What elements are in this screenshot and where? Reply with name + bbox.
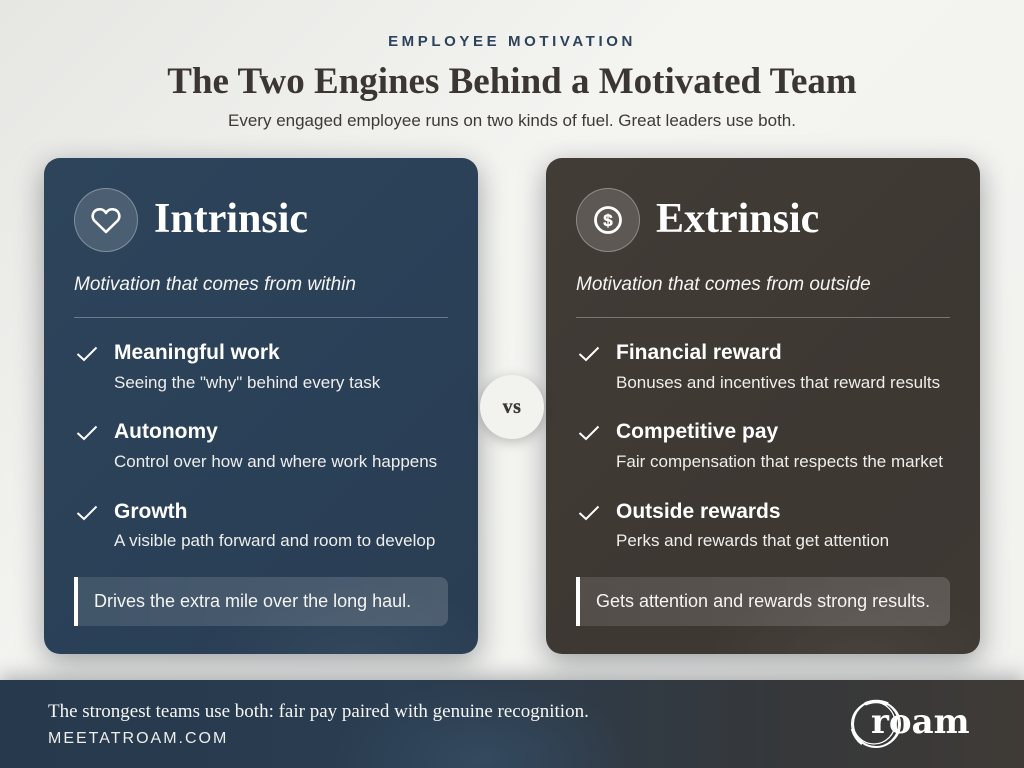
item: meaningful work: Seeing the "why" behind every task: [114, 373, 380, 392]
item: growth: Growth: [114, 500, 188, 523]
item: competitive pay: Competitive pay: [616, 420, 778, 443]
callout: [576, 577, 950, 626]
vs badge: [480, 375, 544, 439]
footer url: MEETATROAM.COM: [48, 730, 228, 747]
item: autonomy: [76, 420, 437, 471]
panel heading: Intrinsic: [154, 196, 308, 242]
logo: roam: [850, 700, 970, 748]
panel heading: Extrinsic: [656, 196, 819, 242]
item: meaningful work: [76, 341, 380, 392]
panel: intrinsic: [44, 158, 478, 654]
subtitle: Every engaged employee runs on two kinds of fuel. Great leaders use both.: [228, 111, 796, 130]
item: outside rewards: Outside rewards: [616, 500, 781, 523]
icon: dollar coin: [576, 188, 640, 252]
item: growth: [76, 500, 435, 550]
callout: Gets attention and rewards strong results.: [596, 591, 930, 611]
item: competitive pay: Fair compensation that respects the market: [616, 452, 943, 471]
logo rings: [850, 700, 901, 748]
icon: heart: [74, 188, 138, 252]
vs badge: vs: [503, 396, 521, 418]
item: growth: A visible path forward and room to develop: [114, 531, 435, 550]
logo wordmark: roam: [871, 702, 970, 742]
icon: dollar coin: $: [603, 211, 613, 230]
item: financial reward: Bonuses and incentives that reward results: [616, 373, 940, 392]
footer band: [0, 680, 1024, 768]
title: The Two Engines Behind a Motivated Team: [167, 61, 857, 102]
callout: Drives the extra mile over the long haul.: [94, 591, 411, 611]
item: outside rewards: Perks and rewards that get attention: [616, 531, 889, 550]
item: financial reward: Financial reward: [616, 341, 782, 364]
item: outside rewards: [578, 500, 889, 550]
item: autonomy: Control over how and where work happens: [114, 452, 437, 471]
footer takeaway: The strongest teams use both: fair pay paired with genuine recognition.: [48, 701, 589, 722]
tagline: Motivation that comes from outside: [576, 274, 871, 295]
callout: [74, 577, 448, 626]
item: autonomy: Autonomy: [114, 420, 218, 443]
eyebrow heading: EMPLOYEE MOTIVATION: [388, 33, 636, 50]
tagline: Motivation that comes from within: [74, 274, 356, 295]
item: meaningful work: Meaningful work: [114, 341, 280, 364]
panel: extrinsic: [546, 158, 980, 654]
item: competitive pay: [578, 420, 943, 471]
item: financial reward: [578, 341, 940, 392]
